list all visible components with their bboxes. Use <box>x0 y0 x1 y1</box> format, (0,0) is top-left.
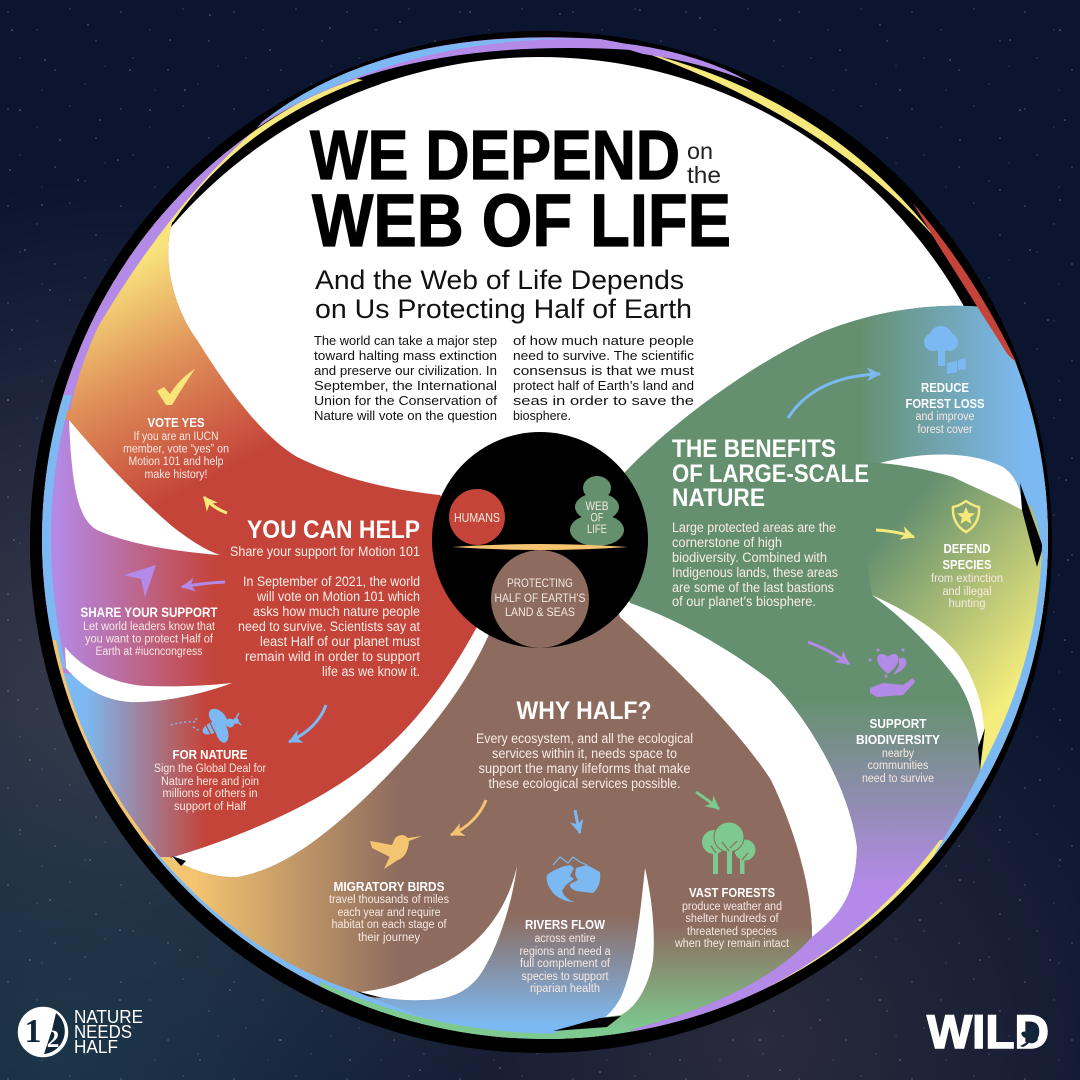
benefits: heading and body: THE BENEFITS <box>672 435 836 463</box>
panel: you can help <box>42 220 477 857</box>
defend species text: SPECIES <box>942 557 992 572</box>
icon: hummingbird <box>370 835 422 869</box>
icon: river <box>547 857 600 902</box>
rivers flow text <box>520 917 611 995</box>
web of life stones: LIFE <box>587 522 607 536</box>
intro text: left column: toward halting mass extinction <box>314 349 497 363</box>
web of life stones: WEB <box>586 499 608 513</box>
benefits: heading and body: OF LARGE-SCALE <box>672 460 869 488</box>
rivers flow text: species to support <box>522 971 609 983</box>
benefits: heading and body: biodiversity. Combined with <box>672 550 827 565</box>
share your support text <box>80 605 218 658</box>
arrow: to rivers flow <box>575 810 580 833</box>
reduce forest loss text: FOREST LOSS <box>906 396 985 411</box>
defend species text: hunting <box>948 598 986 610</box>
title: WEB OF LIFE <box>312 179 731 262</box>
logo: nature needs half <box>18 1007 143 1057</box>
you can help: heading and body: least Half of our planet must <box>260 634 420 649</box>
intro text: left column: The world can take a major step <box>314 334 497 348</box>
logo: wild: WILD <box>927 1005 1049 1058</box>
migratory birds text: travel thousands of miles <box>329 894 449 906</box>
why half: heading and body: Every ecosystem, and all the ecological <box>476 731 693 746</box>
you can help: heading and body: Share your support for Motion 101 <box>230 543 420 559</box>
for nature text: FOR NATURE <box>172 747 248 762</box>
migratory birds text <box>329 879 449 944</box>
panel: benefits of large-scale nature <box>624 306 1048 1031</box>
intro text: right column <box>513 334 695 423</box>
benefits: heading and body: are some of the last bastions <box>672 580 834 595</box>
icon: forest <box>702 822 756 874</box>
icon: check mark <box>157 369 195 405</box>
vote yes text: VOTE YES <box>148 415 205 430</box>
you can help: heading and body: life as we know it. <box>322 664 420 679</box>
migratory birds text: each year and require <box>338 907 440 919</box>
title connector: on the <box>687 138 721 188</box>
subtitle: And the Web of Life Depends <box>315 265 684 295</box>
icon: paper plane <box>124 565 156 597</box>
benefits: heading and body: Large protected areas are the <box>672 520 836 535</box>
you can help: heading and body: asks how much nature people <box>253 604 420 619</box>
rivers flow text: regions and need a <box>520 946 611 958</box>
arrow: to vast forests <box>696 792 719 809</box>
intro text: left column <box>314 334 498 423</box>
benefits: heading and body: Indigenous lands, these areas <box>672 565 838 580</box>
intro text: right column: biosphere. <box>513 409 571 423</box>
web of life stones <box>570 476 624 546</box>
migratory birds text: habitat on each stage of <box>332 919 447 931</box>
logo: nature needs half: 2 <box>47 1026 59 1053</box>
vast forests text: VAST FORESTS <box>689 885 775 900</box>
why half: heading and body: these ecological services possible. <box>488 776 680 791</box>
share your support text: Earth at #iucncongress <box>96 646 203 658</box>
intro text: right column: consensus is that we must <box>513 364 695 378</box>
title connector: on the: on <box>687 138 713 164</box>
share your support text: Let world leaders know that <box>83 621 216 633</box>
you can help: heading and body: YOU CAN HELP <box>247 516 420 544</box>
benefits: heading and body: of our planet’s biosphere. <box>672 594 816 609</box>
intro text: right column: need to survive. The scientific <box>513 349 694 363</box>
why half: heading and body: WHY HALF? <box>516 697 652 725</box>
support biodiversity text: SUPPORT <box>870 716 927 731</box>
web of life stones: OF <box>590 510 604 524</box>
intro text: left column: and preserve our civilization. In <box>314 364 497 378</box>
arrow: to vote yes <box>204 497 227 513</box>
you can help: heading and body: remain wild in order to support <box>245 649 420 664</box>
reduce forest loss text <box>906 380 985 436</box>
icon: shield with star <box>953 501 979 532</box>
subtitle: on Us Protecting Half of Earth <box>315 294 692 324</box>
arrow: to defend species <box>876 530 914 537</box>
for nature text: Nature here and join <box>161 776 259 788</box>
why half: heading and body <box>476 697 693 791</box>
share your support text: you want to protect Half of <box>85 634 214 646</box>
vast forests text: produce weather and <box>682 901 782 913</box>
rivers flow text: across entire <box>534 933 596 945</box>
subtitle <box>315 265 692 324</box>
icon: bee <box>171 705 241 744</box>
panel: why half <box>156 614 814 1039</box>
for nature text <box>154 747 266 813</box>
vast forests text: threatened species <box>687 926 777 938</box>
intro text: left column: Nature will vote on the question <box>314 409 497 423</box>
humans circle <box>449 489 505 545</box>
rivers flow text: full complement of <box>520 958 611 970</box>
protecting half circle <box>491 550 589 648</box>
intro text: left column: Union for the Conservation of <box>314 394 498 408</box>
rivers flow text: RIVERS FLOW <box>525 917 606 932</box>
defend species text: from extinction <box>931 573 1003 585</box>
why half: heading and body: support the many lifeforms that make <box>478 761 690 776</box>
logo: nature needs half: NEEDS <box>74 1022 132 1042</box>
support biodiversity text: BIODIVERSITY <box>856 732 940 747</box>
benefits: heading and body: cornerstone of high <box>672 535 782 550</box>
defend species text: DEFEND <box>944 541 990 556</box>
intro text: right column: of how much nature people <box>513 334 694 348</box>
arrow: to support biodiversity <box>808 642 849 664</box>
for nature text: millions of others in <box>162 788 258 800</box>
logo: nature needs half: NATURE <box>74 1007 143 1027</box>
for nature text: Sign the Global Deal for <box>154 763 266 775</box>
vote yes text: member, vote “yes” on <box>123 444 229 456</box>
benefits: heading and body: NATURE <box>672 484 765 512</box>
vast forests text: shelter hundreds of <box>686 913 779 925</box>
logo: nature needs half: HALF <box>74 1037 118 1057</box>
migratory birds text: MIGRATORY BIRDS <box>334 879 445 894</box>
center balance diagram <box>432 432 648 648</box>
vote yes text <box>123 415 229 481</box>
migratory birds text: their journey <box>358 932 420 944</box>
you can help: heading and body: In September of 2021, the world <box>243 574 420 589</box>
arrow: to for nature <box>289 705 326 742</box>
vast forests text: when they remain intact <box>674 938 790 950</box>
for nature text: support of Half <box>174 801 247 813</box>
share your support text: SHARE YOUR SUPPORT <box>80 605 218 620</box>
protecting half circle: HALF OF EARTH’S <box>494 591 586 605</box>
you can help: heading and body: will vote on Motion 101 which <box>256 589 420 604</box>
support biodiversity text: communities <box>868 760 929 772</box>
balance beam <box>452 544 628 550</box>
title: WE DEPEND <box>310 116 680 194</box>
why half: heading and body: services within it, needs space to <box>492 746 677 761</box>
arrow: to share your support <box>182 582 225 587</box>
intro text: left column: September, the International <box>314 379 497 393</box>
defend species text: and illegal <box>942 586 992 598</box>
icon: tree and stumps <box>924 326 966 374</box>
title connector: on the: the <box>687 162 721 188</box>
intro text: right column: seas in order to save the <box>513 394 694 408</box>
rivers flow text: riparian health <box>530 983 600 995</box>
rim: top and upper-right lens slivers <box>257 37 1016 362</box>
support biodiversity text: need to survive <box>862 773 934 785</box>
reduce forest loss text: and improve <box>916 411 974 423</box>
vote yes text: If you are an IUCN <box>134 431 218 443</box>
support biodiversity text <box>856 716 940 785</box>
protecting half circle: PROTECTING <box>507 576 573 590</box>
defend species text <box>931 541 1003 610</box>
arrow: to migratory birds <box>451 800 486 835</box>
reduce forest loss text: REDUCE <box>921 380 969 395</box>
you can help: heading and body <box>230 516 420 679</box>
vote yes text: Motion 101 and help <box>128 456 224 468</box>
benefits: heading and body <box>672 435 869 609</box>
vote yes text: make history! <box>144 469 208 481</box>
arrow: to reduce forest loss <box>788 374 880 418</box>
intro text: right column: protect half of Earth’s land and <box>513 379 694 393</box>
vast forests text <box>674 885 790 950</box>
icon: hand with hearts <box>868 648 915 697</box>
title <box>310 116 731 262</box>
protecting half circle: LAND & SEAS <box>505 605 575 619</box>
humans circle: HUMANS <box>454 510 500 525</box>
support biodiversity text: nearby <box>882 748 914 760</box>
you can help: heading and body: need to survive. Scientists say at <box>238 619 420 634</box>
reduce forest loss text: forest cover <box>918 424 973 436</box>
logo: nature needs half: 1 <box>24 1013 42 1050</box>
